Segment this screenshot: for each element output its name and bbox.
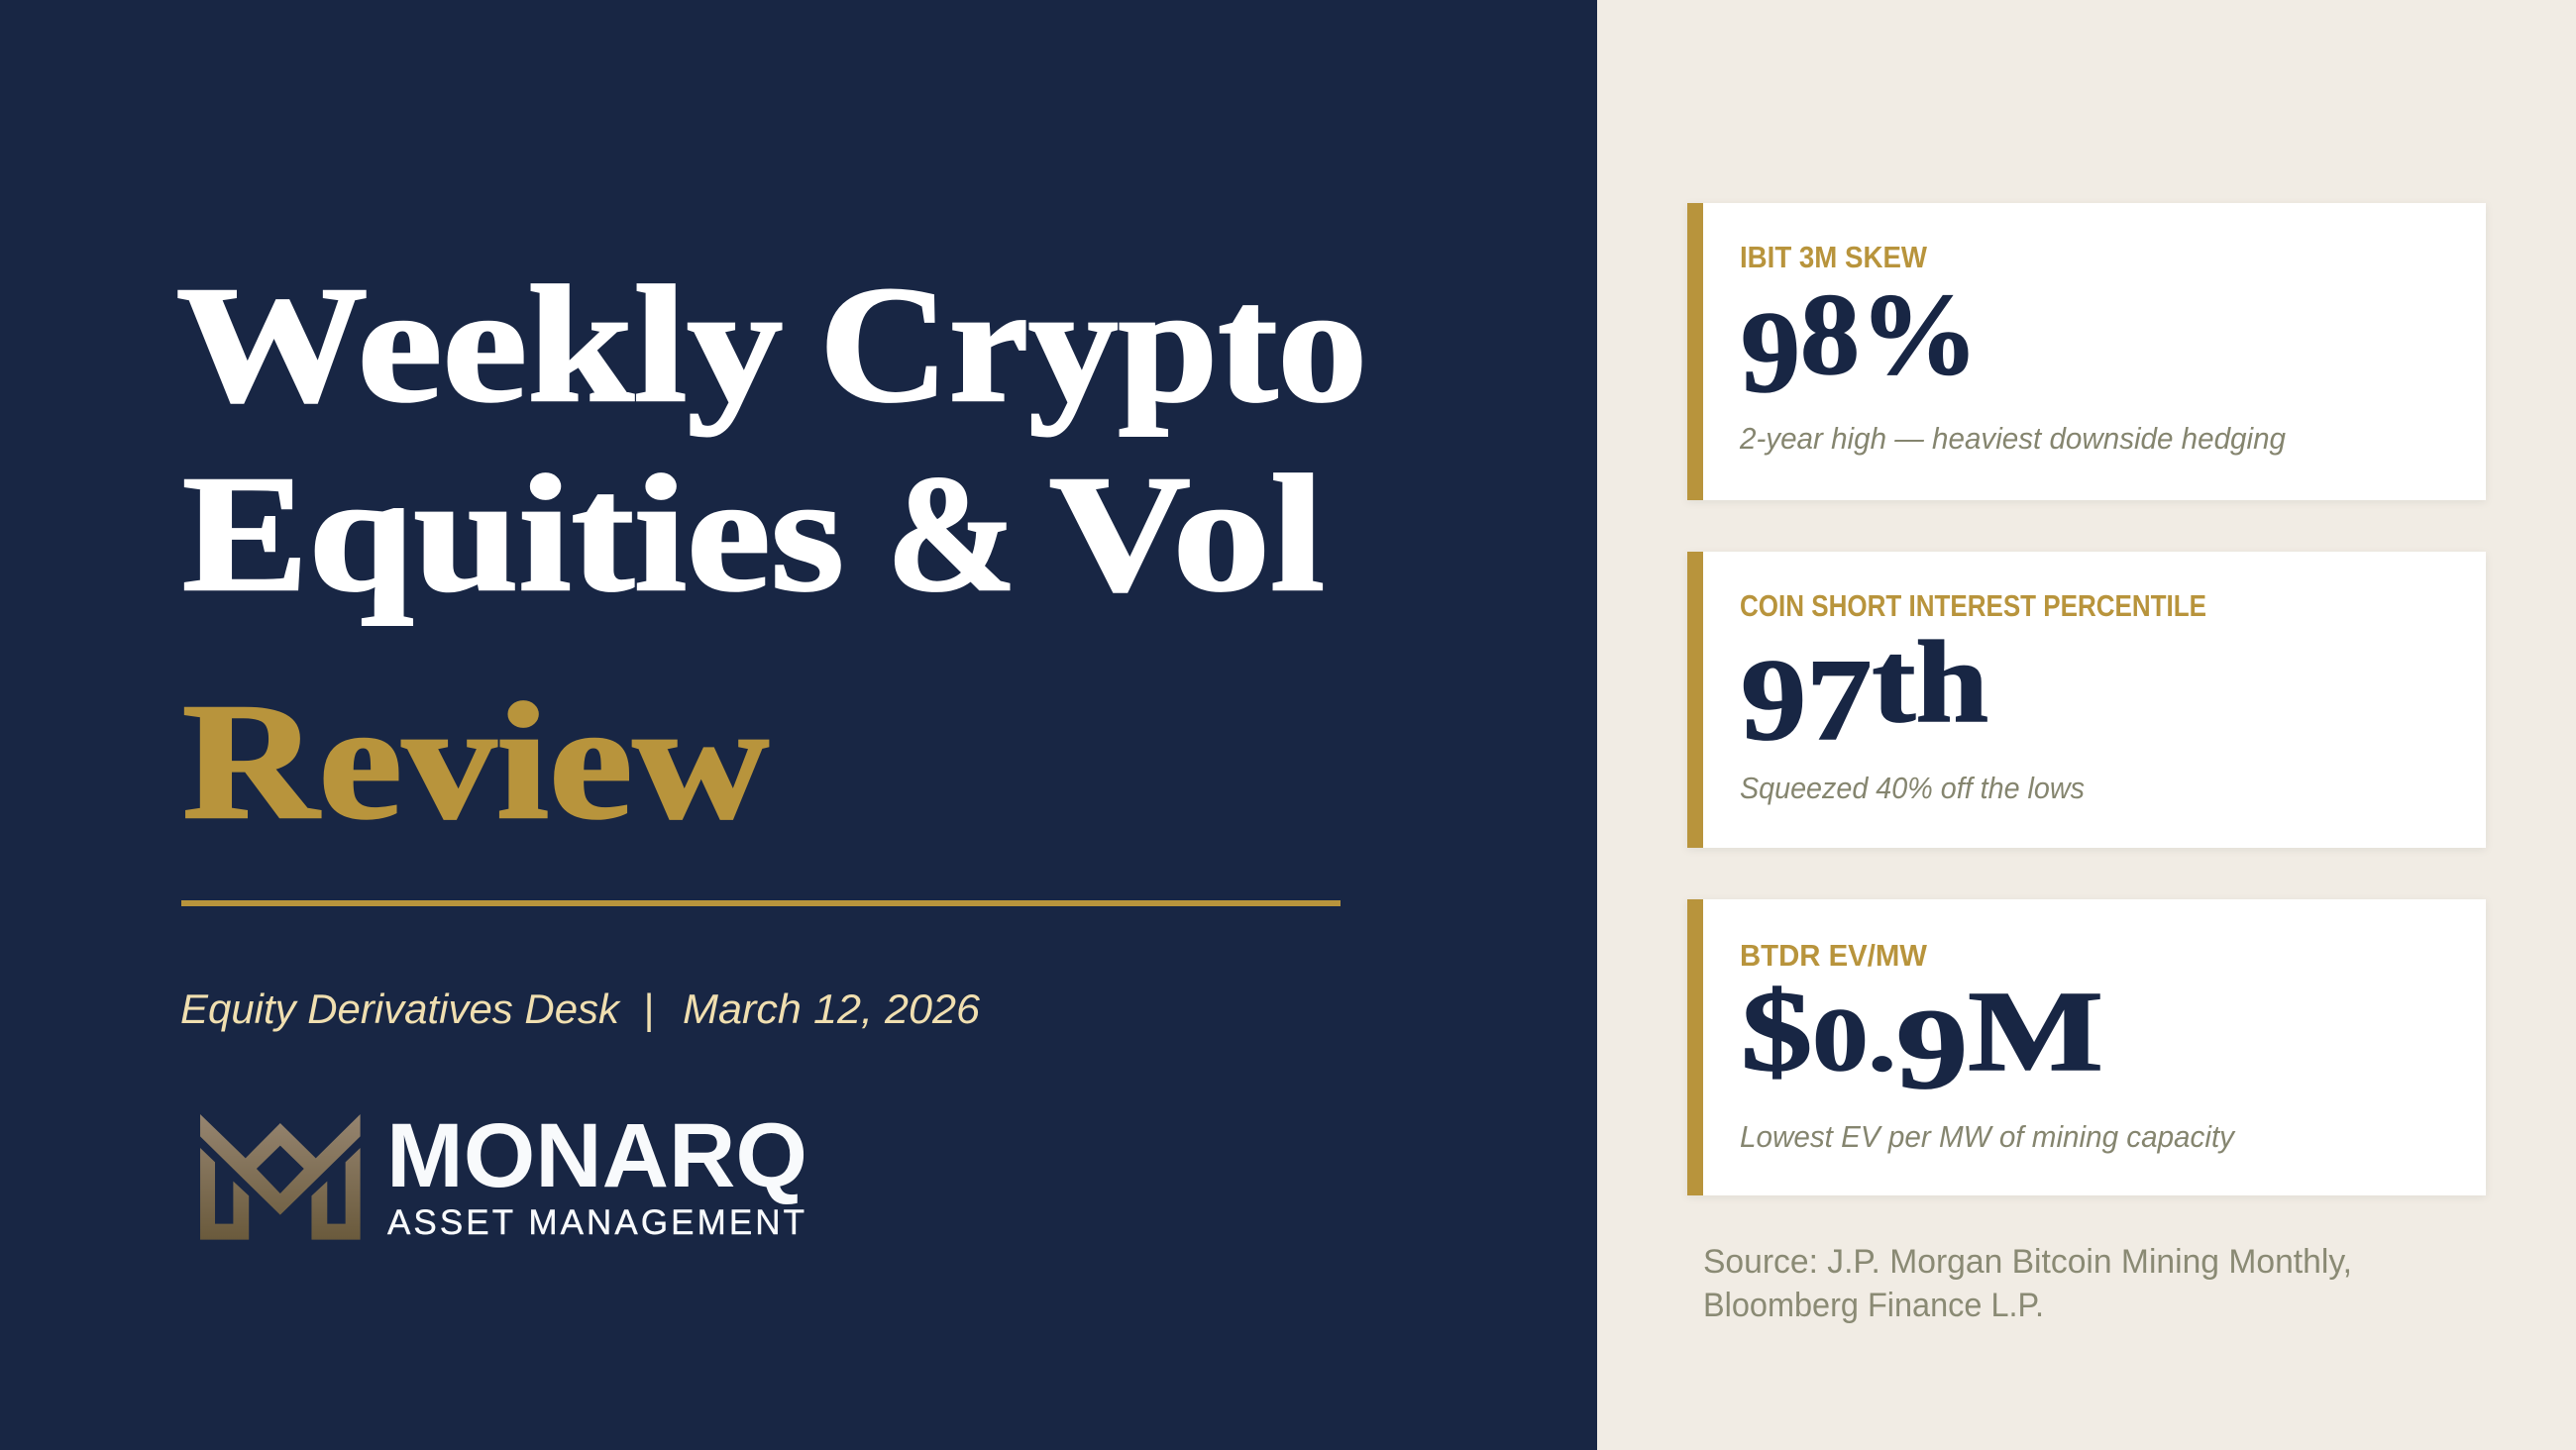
source note: Bloomberg Finance L.P. <box>1703 1287 2044 1324</box>
card label: COIN SHORT INTEREST PERCENTILE <box>1740 588 2206 623</box>
card: COIN short interest <box>1687 552 2486 848</box>
logo tagline: ASSET MANAGEMENT <box>387 1203 805 1242</box>
card note: Lowest EV per MW of mining capacity <box>1740 1119 2236 1154</box>
source note <box>1703 1243 2352 1324</box>
card value: M <box>1968 969 2103 1095</box>
card value: 8% <box>1800 269 1979 399</box>
card value: $0. <box>1741 969 1879 1095</box>
accent bar <box>1687 552 1703 848</box>
title: Weekly Crypto Equities & Vol: Crypto <box>819 253 1367 437</box>
accent bar <box>1687 899 1703 1195</box>
title: Weekly Crypto Equities & Vol: Vol <box>1049 442 1325 626</box>
card value: 9 <box>1741 287 1800 417</box>
card: BTDR EV/MW <box>1687 899 2486 1195</box>
card note: 2-year high — heaviest downside hedging <box>1739 421 2286 456</box>
title: Weekly Crypto Equities & Vol: Equities <box>182 442 844 626</box>
card label: BTDR EV/MW <box>1740 938 1928 973</box>
title: Weekly Crypto Equities & Vol <box>176 253 1367 626</box>
subtitle: desk and date: | <box>643 985 654 1033</box>
subtitle: desk and date <box>180 985 981 1033</box>
subtitle: desk and date: March 12, 2026 <box>683 985 981 1032</box>
source note: Source: J.P. Morgan Bitcoin Mining Monthly, <box>1703 1243 2352 1281</box>
card value: 97 <box>1741 635 1872 765</box>
title accent: Review: Review <box>182 670 769 854</box>
logo wordmark: MONARQ <box>386 1105 807 1206</box>
card label: IBIT 3M SKEW <box>1740 240 1928 274</box>
card: IBIT 3M skew <box>1687 203 2486 500</box>
title: Weekly Crypto Equities & Vol: & <box>887 442 1017 626</box>
title: Weekly Crypto Equities & Vol: Weekly <box>176 253 783 437</box>
panel: navy title panel <box>0 0 1597 1450</box>
subtitle: desk and date: Equity Derivatives Desk <box>180 985 621 1032</box>
gold divider <box>181 900 1341 906</box>
icon: crown monogram <box>200 1114 361 1240</box>
card value: th <box>1872 617 1988 747</box>
card note: Squeezed 40% off the lows <box>1740 771 2085 805</box>
card value: 9 <box>1896 986 1968 1113</box>
logo: Monarq Asset Management <box>200 1105 807 1242</box>
accent bar <box>1687 203 1703 500</box>
